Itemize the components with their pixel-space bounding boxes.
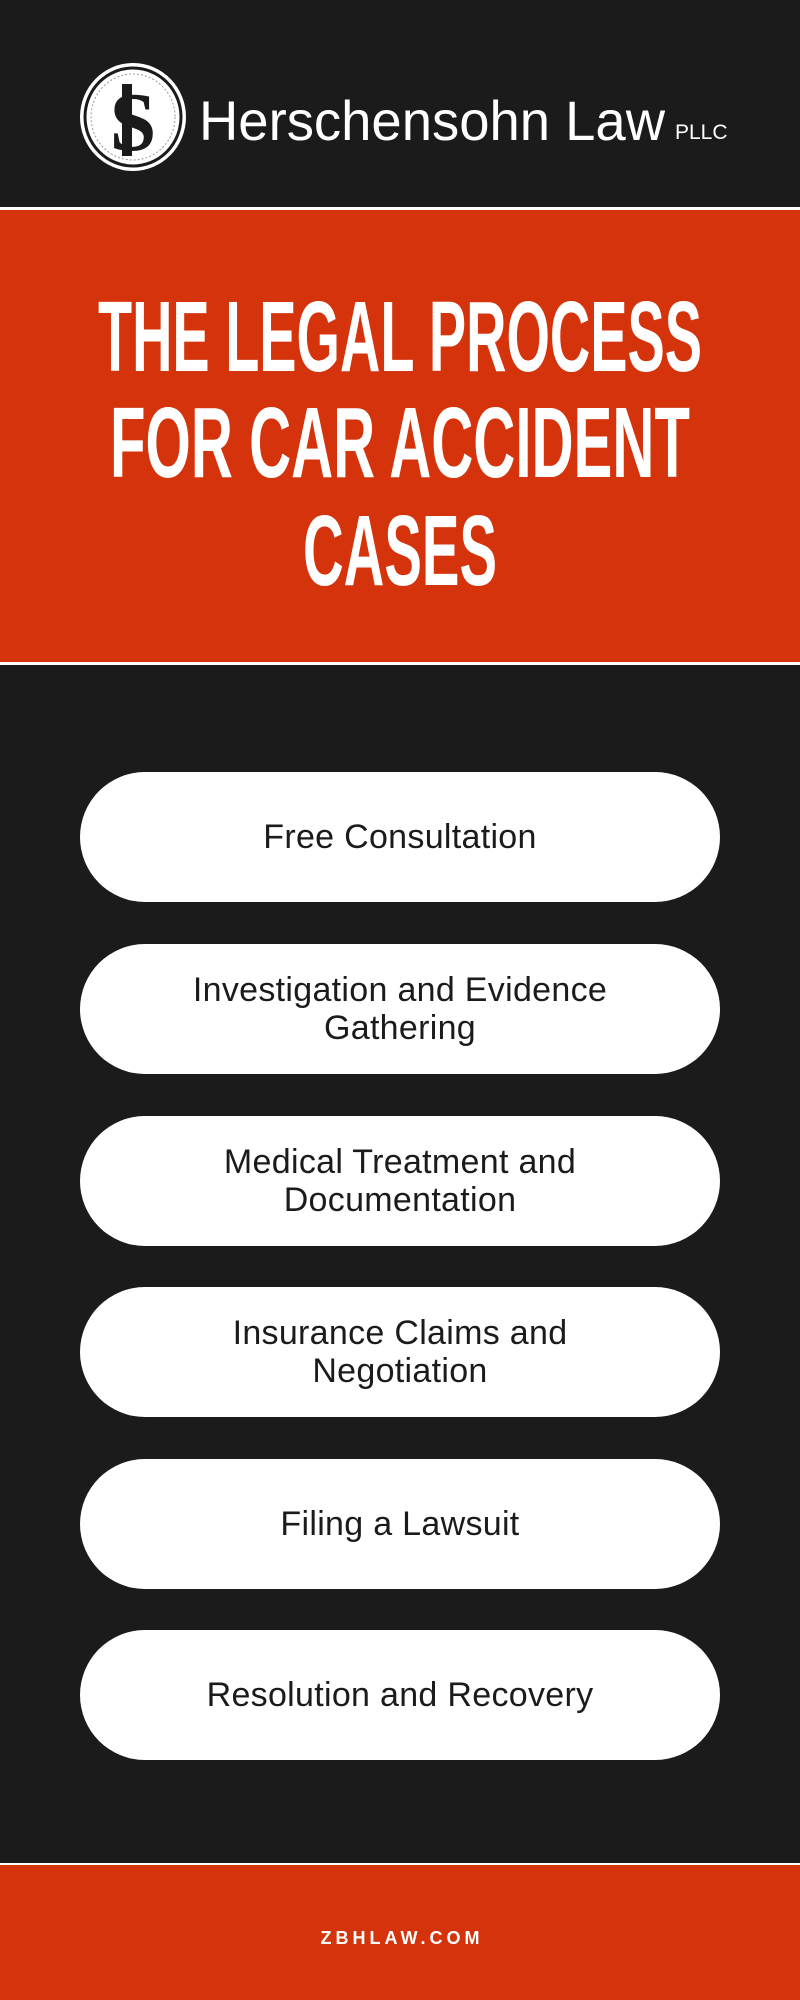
step 4 [80, 1287, 720, 1417]
step 5: Filing a Lawsuit [280, 1505, 520, 1543]
step 2: Investigation and Evidence [193, 971, 607, 1009]
step 3: Medical Treatment and [224, 1143, 576, 1181]
step 1: Free Consultation [263, 818, 537, 856]
step 6: Resolution and Recovery [207, 1676, 593, 1714]
brand name: Herschensohn Law [199, 89, 666, 152]
step 6 [80, 1630, 720, 1760]
icon: monogram [80, 63, 186, 171]
title [98, 281, 702, 607]
step 2: Gathering [324, 1009, 476, 1047]
title: CASES [303, 495, 497, 607]
footer [0, 1865, 800, 2000]
footer url: ZBHLAW.COM [320, 1928, 484, 1948]
step 5 [80, 1459, 720, 1589]
step 3: Documentation [284, 1181, 516, 1219]
title band [0, 210, 800, 662]
header logo [80, 63, 728, 171]
step 3 [80, 1116, 720, 1246]
step 4: Insurance Claims and [233, 1314, 567, 1352]
step 1 [80, 772, 720, 902]
step 4: Negotiation [312, 1352, 488, 1390]
header logo: PLLC [675, 121, 728, 144]
icon: monogram: S [110, 76, 156, 169]
step 2 [80, 944, 720, 1074]
